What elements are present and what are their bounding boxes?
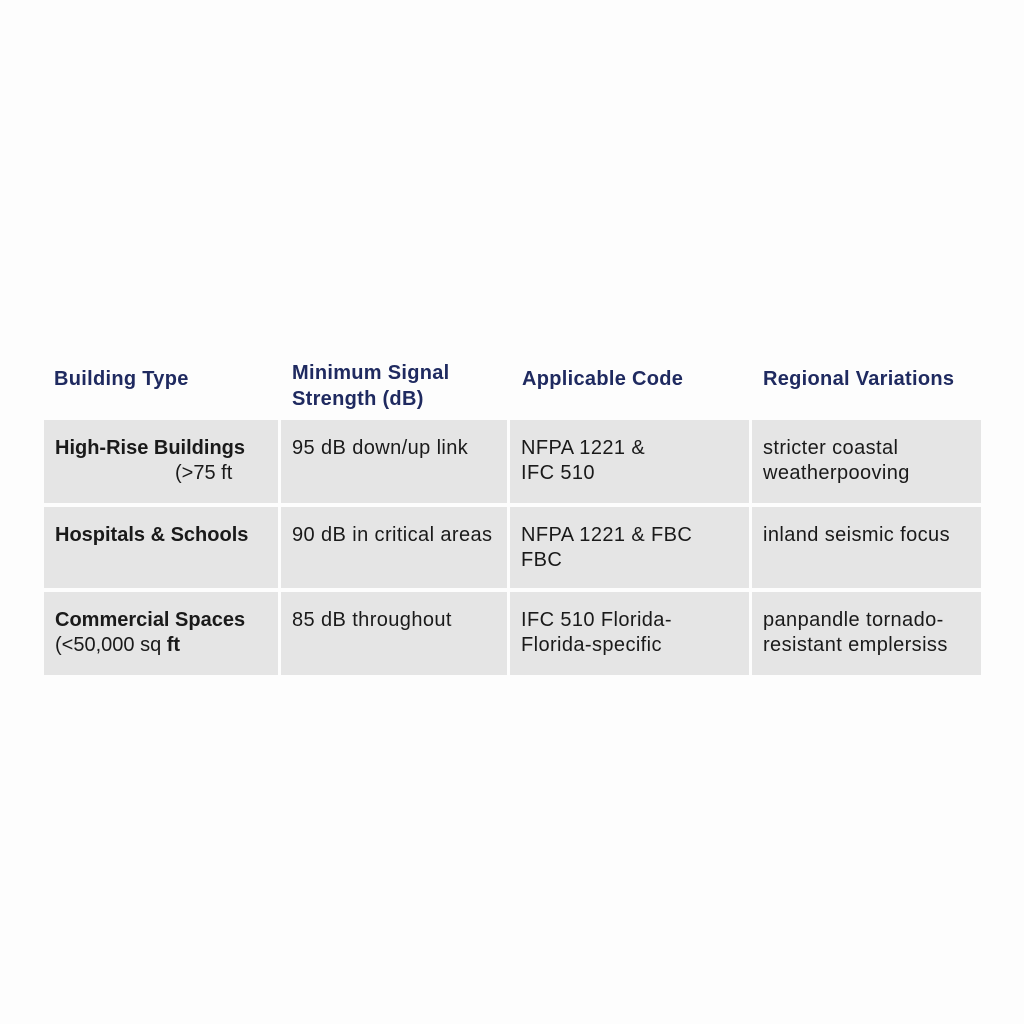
header: Minimum Signal Strength <box>292 362 450 410</box>
row 1 cell: code <box>510 420 749 503</box>
header: Regional Variations: Regional Variations <box>763 368 954 390</box>
row 3 cell: regional <box>752 592 981 675</box>
row 1 cell: regional: weatherpooving <box>763 462 910 484</box>
header: Minimum Signal Strength: Minimum Signal <box>292 362 450 384</box>
header: Building Type: Building Type <box>54 368 189 390</box>
table <box>44 362 981 675</box>
row 1 cell: code: IFC 510 <box>521 462 595 484</box>
header: Minimum Signal Strength: Strength (dB) <box>292 388 424 410</box>
row 2 cell: signal <box>281 507 507 588</box>
row 1 cell: building <box>44 420 278 503</box>
row 2 cell: building: Hospitals & Schools <box>55 524 248 546</box>
row 3 cell: building: (<50,000 sq ft <box>55 634 180 656</box>
row 2 cell: signal: 90 dB in critical areas <box>292 524 492 546</box>
row 3 cell: signal: 85 dB throughout <box>292 609 452 631</box>
row 3 cell: regional: resistant emplersiss <box>763 634 948 656</box>
row 1 cell: signal: 95 dB down/up link <box>292 437 468 459</box>
row 1 cell: building: (>75 ft <box>175 462 232 484</box>
row 3 cell: signal <box>281 592 507 675</box>
header: Applicable Code: Applicable Code <box>522 368 683 390</box>
row 3 cell: building: Commercial Spaces <box>55 609 245 631</box>
row 1 cell: building: High-Rise Buildings <box>55 437 245 459</box>
row 2 cell: building <box>44 507 278 588</box>
row 1 cell: code: NFPA 1221 & <box>521 437 645 459</box>
row 2 cell: regional <box>752 507 981 588</box>
row 3 cell: code: IFC 510 Florida- <box>521 609 672 631</box>
row 3 cell: regional: panpandle tornado- <box>763 609 944 631</box>
row 2 cell: code: NFPA 1221 & FBC <box>521 524 692 546</box>
row 1 cell: signal <box>281 420 507 503</box>
row 2 cell: code <box>510 507 749 588</box>
row 3 cell: code: Florida-specific <box>521 634 662 656</box>
row 2 cell: regional: inland seismic focus <box>763 524 950 546</box>
row 1 cell: regional: stricter coastal <box>763 437 898 459</box>
row 1 cell: regional <box>752 420 981 503</box>
row 3 cell: building <box>44 592 278 675</box>
row 3 cell: code <box>510 592 749 675</box>
row 2 cell: code: FBC <box>521 549 562 571</box>
